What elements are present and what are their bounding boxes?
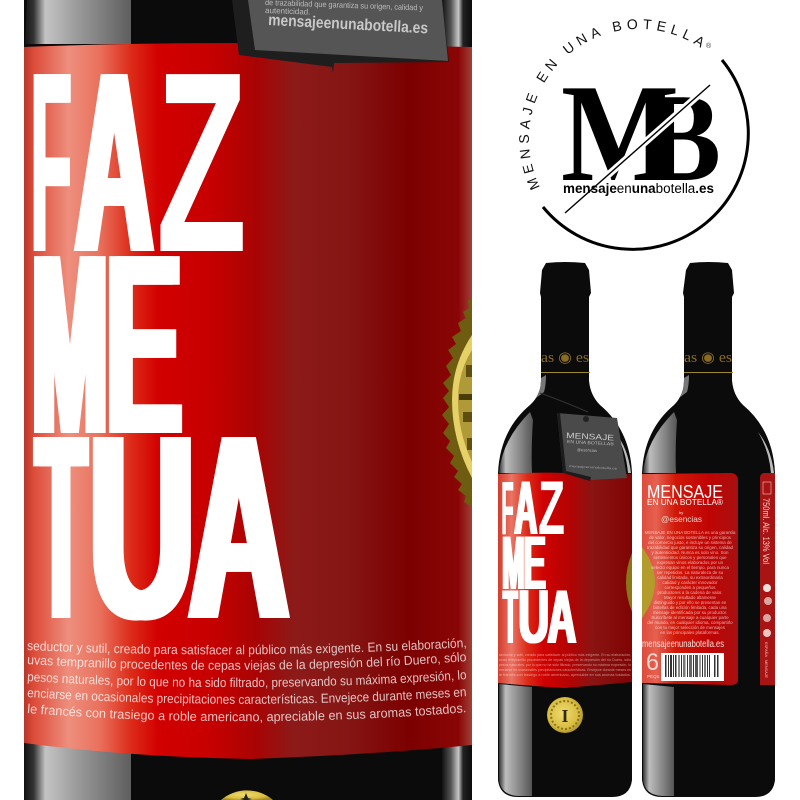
gold medal base of large bottle (221, 790, 273, 800)
large bottle (24, 0, 472, 800)
word: FAZ: Z (156, 19, 247, 306)
shoulder reflection (643, 412, 677, 473)
small hanging tag (557, 413, 627, 481)
back label paragraph: MENSAJE EN UNA BOTELLA es una garantía (645, 530, 736, 535)
side strip label (760, 473, 775, 685)
back label paragraph: de valor, negocios sostenibles y principios (649, 535, 732, 540)
small back bottle: by (679, 510, 683, 515)
back label paragraph: calidad limitada, su extraordinaria (657, 575, 723, 580)
shoulder reflection (499, 412, 533, 473)
back label paragraph: mensaje identificada por su productor. (653, 610, 727, 615)
small medal (547, 697, 583, 733)
word: TUA (32, 380, 290, 674)
back label paragraph: selecto equipo en el tiempo, para nunca (651, 565, 729, 570)
small word: FAZ: Z (538, 466, 565, 551)
back label paragraph: trazabilidad que garantiza su origen, calidad (647, 545, 734, 550)
word: ME: E (101, 201, 180, 488)
small front bottle: as ◉ es (541, 350, 589, 366)
neck highlight (679, 375, 689, 398)
logo monogram M: M (561, 56, 679, 211)
small back bottle: EN UNA BOTELLA® (647, 498, 723, 507)
back label paragraph: calidad y carácter innovador (663, 580, 718, 585)
small hanging tag: EN UNA BOTELLA® (567, 438, 615, 446)
back label paragraph: corresponden a pequeños (664, 585, 716, 590)
small word: TUA (502, 575, 577, 660)
back label paragraph: distinguido y por ello se presentan en (654, 600, 727, 605)
word: ME: M (28, 201, 103, 488)
word: FAZ: A (71, 19, 149, 306)
large label small print: pesos naturales, por lo que no ha sido filtrado, preservando su máxima expresión, lo (28, 670, 466, 690)
back label paragraph: ser repetidos. La naturaleza de su (657, 570, 724, 575)
side strip label: ESPAÑA · MENSAJE (764, 642, 769, 678)
back label paragraph: botellas de edición limitada, cada una (653, 605, 727, 610)
word: FAZ: F (29, 19, 72, 306)
barcode (661, 653, 724, 681)
small medal: I (561, 706, 569, 726)
small word: TUA: U (517, 575, 548, 660)
neck foil band (684, 372, 733, 373)
lower reflection (643, 684, 674, 796)
neck foil band (541, 372, 590, 373)
back label paragraph: del comercio justo, e incluye un sistema de (648, 540, 732, 545)
back label paragraph: sentimientos únicos y personales que (653, 555, 727, 560)
back label number: 6 (646, 649, 659, 676)
cord (540, 393, 588, 412)
side strip label: 750ml. Alc. 13% Vol (761, 498, 771, 564)
logo URL: mensajeenunabotella.es (563, 181, 714, 196)
large label small print: uvas tempranillo procedentes de cepas viejas de la depresión del río Duero, sólo (28, 652, 466, 672)
logo: seal: ® (706, 42, 712, 50)
word: TUA: A (184, 380, 283, 674)
back label paragraph: y autenticidad. Nunca es solo vino. Son (652, 550, 729, 555)
back label paragraph: productores a la cadena de valor. (658, 590, 722, 595)
logo ring (543, 60, 748, 249)
lower glass reflection (24, 740, 131, 800)
word: FAZ (29, 19, 247, 306)
back label paragraph: expresan vinos elaborados por un (657, 560, 724, 565)
logo slash (565, 85, 710, 213)
back label paragraph: en las principales plataformas. (660, 630, 720, 635)
small back bottle: as ◉ es (684, 350, 732, 366)
large label small print: enciarse en ocasionales precipitaciones características. Envejece durante meses en (28, 688, 466, 706)
logo curved text: MENSAJE EN UNA BOTELLA (519, 19, 703, 190)
small back bottle: PEQS (647, 674, 660, 679)
small slogan text (500, 466, 577, 660)
small word: ME (500, 521, 546, 606)
hanging tag on large bottle: autenticidad. (265, 6, 311, 17)
large label small print (28, 638, 466, 724)
large label small print: seductor y sutil, creado para satisfacer al público más exigente. En su elaboración, (28, 638, 466, 657)
logo: seal (519, 19, 750, 251)
small back bottle: @esencias (661, 515, 702, 524)
small label print (499, 652, 632, 677)
small word: TUA: A (546, 575, 575, 660)
back label heading: MENSAJE (647, 482, 723, 502)
strip icons (763, 584, 771, 592)
small label print: pesos naturales, por lo que no ha sido filtrado, preservando su máxima expresión, lo (499, 662, 632, 667)
small label print: uvas tempranillo procedentes de cepas viejas de la depresión del río Duero, sólo (499, 657, 632, 662)
small word: TUA: T (502, 575, 517, 660)
tag URL: mensajeenunabotella.es (268, 12, 429, 37)
upper glass reflection (25, 0, 131, 44)
small word: FAZ: A (513, 466, 536, 551)
logo monogram B: B (645, 69, 721, 208)
large label small print: le francés con trasiego a roble americano, apreciable en sus aromas tostados. (28, 704, 466, 724)
small hanging tag: mensajeenunabotella.es (569, 464, 618, 471)
small hanging tag: MENSAJE (566, 431, 614, 443)
back label paragraph: con tu mejor selección de mensajes (655, 625, 726, 630)
small word: FAZ (501, 466, 565, 551)
small hanging tag: @esencias (577, 447, 597, 453)
word: TUA: U (84, 380, 191, 674)
word: ME (28, 201, 182, 488)
back label paragraph: del mundo, en cualquier idioma, compartirlo (647, 620, 733, 625)
neck highlight (536, 375, 546, 398)
large slogan text (28, 19, 290, 674)
small medal on edge (626, 553, 632, 612)
back label (642, 473, 738, 685)
hanging tag on large bottle (232, 0, 449, 73)
back label paragraph: Mayor resultado altamente (664, 595, 717, 600)
small word: ME: M (500, 521, 523, 606)
small word: FAZ: F (501, 466, 514, 551)
small label print: seductor y sutil, creado para satisfacer al público más exigente. En su elaboración, (499, 652, 631, 657)
back label paragraph (645, 530, 736, 635)
small word: ME: E (522, 521, 545, 606)
large red label (24, 43, 472, 759)
small red label (498, 473, 632, 688)
word: TUA: T (32, 380, 84, 674)
small front bottle (498, 262, 632, 797)
gold medal on large label (442, 300, 472, 510)
small back bottle (642, 262, 775, 797)
back label paragraph: Suscríbete al mensaje a cualquier parte (651, 615, 729, 620)
small label print: enciarse en ocasionales precipitaciones características. Envejece durante meses en (499, 667, 631, 672)
small label print: le francés con trasiego a roble americano, apreciable en sus aromas tostados. (499, 672, 631, 677)
back label URL: mensajeenunabotella.es (642, 638, 724, 650)
back label medal (642, 547, 655, 618)
lower reflection (499, 684, 532, 796)
